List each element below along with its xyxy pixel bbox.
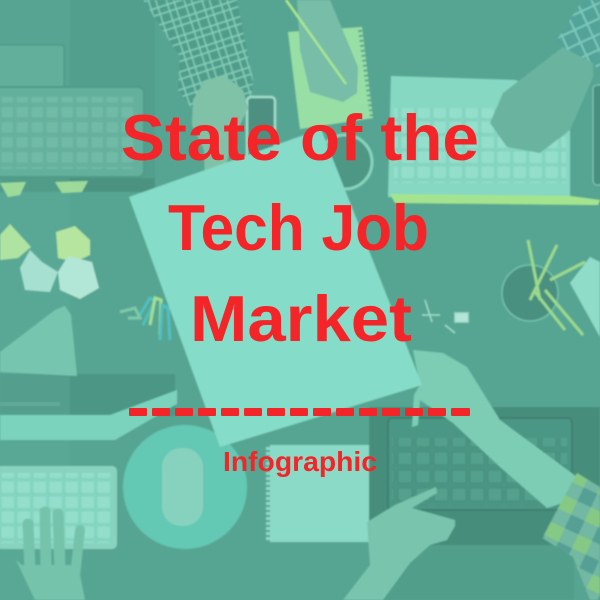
lower desk shadow [369,545,574,600]
coffee mug [318,135,372,189]
laptop top left [0,45,144,177]
left hand on keyboard [16,512,85,600]
white keyboard [0,466,117,549]
notepad spiral [360,30,372,118]
title [121,101,479,355]
monitor stand [0,306,77,376]
subtitle: Infographic [223,446,377,477]
mouse pad [123,425,247,549]
notepad [288,27,373,129]
calculator [570,257,600,337]
checked cuff [542,473,600,600]
sheet of paper [129,129,422,447]
plaid sleeve [143,0,253,113]
phone [247,97,275,159]
hand on paper [192,76,248,183]
dark laptop [369,407,600,545]
white laptop [388,76,600,205]
mouse [162,448,203,526]
binder clips [422,300,468,333]
crumpled paper top [0,181,88,197]
paper clips [120,298,170,340]
pencil cup [502,240,585,335]
monitor base [0,390,177,440]
title line 1: State of the [121,101,479,174]
dashed divider [129,408,470,416]
pencil [286,0,346,84]
writing hand [297,0,358,102]
shirt cuff [555,0,600,72]
upper reaching hand and arm [412,350,577,508]
title line 2: Tech Job [168,191,429,264]
notebook [266,445,370,542]
tablet edge [593,85,600,185]
notebook spiral [266,445,270,542]
title line 3: Market [190,282,412,355]
lower pointing hand [343,487,455,600]
right hand on laptop [490,47,593,153]
crumpled paper balls [0,224,99,299]
